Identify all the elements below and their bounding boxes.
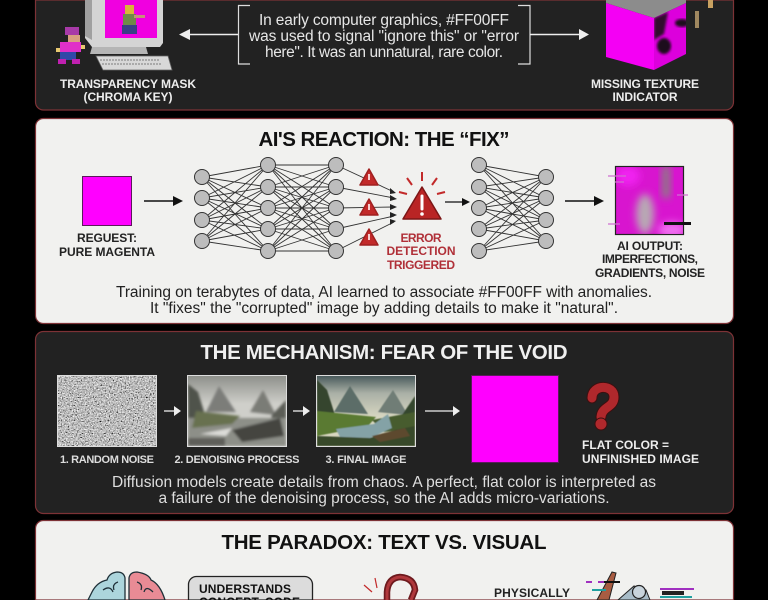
label: error detection	[386, 231, 456, 272]
icon: small warning triangles	[360, 169, 378, 245]
text block: training explanation: Training on terabytes of data, AI learned to associate #FF00FF with anomalies.	[116, 284, 652, 301]
icon: missing texture cube	[606, 0, 713, 70]
panel: the paradox	[36, 520, 734, 600]
diagram: left neural network	[194, 158, 397, 258]
label: AI output	[595, 239, 705, 280]
arrow: denoise to final	[293, 406, 310, 416]
icon: magenta request square	[82, 176, 132, 226]
label: error detection: ERROR	[400, 231, 442, 245]
icon: flat magenta square	[472, 376, 558, 462]
text block: training explanation: It "fixes" the "corrupted" image by adding details to make it "natural".	[150, 300, 618, 317]
label: understands concept: UNDERSTANDS	[199, 582, 291, 596]
image: random noise	[58, 376, 156, 446]
panel: AI's reaction	[36, 118, 734, 324]
text block: diffusion explanation	[112, 474, 656, 507]
text block: early graphics explanation: In early computer graphics, #FF00FF	[259, 12, 509, 29]
label: AI output: GRADIENTS, NOISE	[595, 266, 705, 280]
label: transparency mask: TRANSPARENCY MASK	[60, 77, 196, 91]
label: physically: PHYSICALLY	[494, 586, 570, 600]
arrow: text to cube	[530, 29, 589, 40]
step labels: 3. FINAL IMAGE	[326, 454, 406, 466]
heading: the mechanism: THE MECHANISM: FEAR OF THE VOID	[200, 341, 568, 364]
arrow: text to computer	[179, 29, 238, 40]
step labels	[60, 454, 406, 466]
label: missing texture: MISSING TEXTURE	[591, 77, 699, 91]
text block: training explanation	[116, 284, 652, 317]
icon: big error triangle	[399, 172, 445, 219]
label: error detection: DETECTION	[386, 244, 456, 258]
label: missing texture	[591, 77, 699, 104]
heading: the paradox: THE PARADOX: TEXT VS. VISUAL	[222, 531, 546, 554]
image: final image landscape	[316, 376, 416, 446]
icon: broken chain link	[364, 577, 415, 600]
label: transparency mask: (CHROMA KEY)	[84, 90, 172, 104]
label: transparency mask	[60, 77, 196, 104]
image: AI output with imperfections	[608, 166, 691, 238]
label: missing texture: INDICATOR	[612, 90, 678, 104]
label: flat color: UNFINISHED IMAGE	[582, 452, 699, 466]
arrow: error to network	[445, 198, 470, 206]
diagram: right neural network	[472, 158, 554, 258]
step labels: 2. DENOISING PROCESS	[174, 454, 300, 466]
label: understands concept	[188, 576, 312, 600]
panel: the mechanism	[36, 332, 734, 514]
heading: AI's reaction: AI'S REACTION: THE “FIX”	[258, 128, 510, 151]
label: request: PURE MAGENTA	[59, 245, 155, 259]
arrow: final to flat color	[425, 406, 460, 416]
label: request: REGUEST:	[77, 231, 137, 245]
panel: legacy of #FF00FF	[36, 0, 734, 110]
label: AI output: AI OUTPUT:	[617, 239, 683, 253]
arrow: noise to denoise	[164, 406, 181, 416]
label: error detection: TRIGGERED	[387, 258, 455, 272]
icon: retro computer with sprites	[56, 0, 172, 70]
text block: early graphics explanation: here". It was an unnatural, rare color.	[265, 44, 503, 61]
icon: brain	[88, 572, 165, 600]
icon: glitching robotic arm with brush	[586, 572, 694, 600]
label: AI output: IMPERFECTIONS,	[602, 252, 698, 266]
text block: early graphics explanation: was used to signal "ignore this" or "error	[248, 28, 519, 45]
text block: early graphics explanation	[238, 6, 530, 64]
label: flat color	[582, 438, 699, 466]
label: request	[59, 231, 155, 259]
text block: diffusion explanation: a failure of the denoising process, so the AI adds micro-variations.	[158, 490, 610, 507]
icon: question mark	[592, 387, 614, 430]
text block: diffusion explanation: Diffusion models create details from chaos. A perfect, flat color is interpreted as	[112, 474, 656, 491]
image: denoising process	[188, 376, 286, 446]
arrow: network to output	[565, 196, 604, 206]
step labels: 1. RANDOM NOISE	[60, 454, 154, 466]
arrow: request to network	[144, 196, 183, 206]
label: flat color: FLAT COLOR =	[582, 438, 669, 452]
